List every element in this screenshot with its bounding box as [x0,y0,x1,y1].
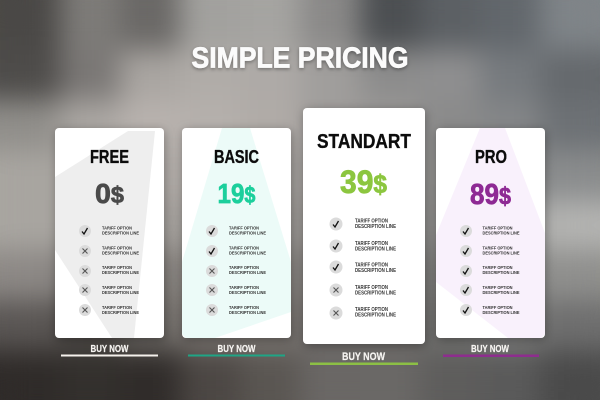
panel: basic plan: 19$ [218,178,256,209]
panel: free plan: FREE [90,147,129,167]
panel: basic plan: DESCRIPTION LINE [229,270,266,275]
button: free plan: BUY NOW [90,344,129,355]
panel: basic plan [182,128,291,338]
button: pro plan [443,344,539,357]
panel: free plan [55,128,164,338]
panel: standart plan: TARIFF OPTION [355,307,388,313]
panel: standart plan: DESCRIPTION LINE [355,268,397,274]
panel: pro plan: PRO [475,147,507,167]
panel: standart plan: DESCRIPTION LINE [355,246,397,252]
panel: standart plan: DESCRIPTION LINE [355,312,397,318]
panel: free plan: TARIFF OPTION [102,265,133,270]
panel: basic plan: TARIFF OPTION [229,305,260,310]
panel: free plan: TARIFF OPTION [102,246,133,250]
panel: free plan: TARIFF OPTION [102,226,133,230]
panel: pro plan: 89$ [470,179,512,211]
panel: pro plan: TARIFF OPTION [482,285,513,290]
panel: free plan: TARIFF OPTION [102,305,133,310]
panel: pro plan: TARIFF OPTION [482,246,513,250]
panel: basic plan: DESCRIPTION LINE [229,290,266,295]
panel: standart plan: TARIFF OPTION [355,241,388,247]
panel: pro plan: DESCRIPTION LINE [482,310,520,315]
button: free plan [61,344,158,356]
title: SIMPLE PRICING [192,42,408,74]
panel: pro plan: TARIFF OPTION [482,226,513,230]
panel: free plan: DESCRIPTION LINE [102,250,139,256]
button: basic plan [188,344,285,356]
panel: free plan: DESCRIPTION LINE [102,230,139,236]
panel: free plan: TARIFF OPTION [102,285,133,290]
panel: basic plan: TARIFF OPTION [229,265,260,270]
panel: standart plan: DESCRIPTION LINE [355,290,397,296]
panel: standart plan: DESCRIPTION LINE [355,224,397,230]
panel: pro plan: TARIFF OPTION [482,265,513,270]
panel: pro plan: DESCRIPTION LINE [482,250,520,256]
button: standart plan: BUY NOW [342,351,385,363]
panel: basic plan: TARIFF OPTION [229,285,260,290]
panel: standart plan: TARIFF OPTION [355,285,388,291]
panel: pro plan: DESCRIPTION LINE [482,230,520,236]
panel: standart plan: STANDART [317,131,411,153]
panel: standart plan [303,108,425,344]
panel: basic plan: DESCRIPTION LINE [229,250,266,256]
button: basic plan: BUY NOW [218,344,256,355]
panel: free plan: DESCRIPTION LINE [102,290,139,295]
panel: pro plan: DESCRIPTION LINE [482,270,520,275]
panel: free plan: 0$ [95,178,124,209]
panel: basic plan: BASIC [214,147,259,167]
panel: standart plan: TARIFF OPTION [355,262,388,268]
panel: pro plan: TARIFF OPTION [482,305,513,310]
panel: standart plan: TARIFF OPTION [355,218,388,224]
panel: basic plan: DESCRIPTION LINE [229,230,266,236]
button: pro plan: BUY NOW [471,344,509,355]
panel: free plan: DESCRIPTION LINE [102,270,139,275]
panel: pro plan [436,128,545,338]
panel: basic plan: TARIFF OPTION [229,226,260,230]
panel: free plan: DESCRIPTION LINE [102,310,139,315]
panel: pro plan: DESCRIPTION LINE [482,290,520,295]
panel: standart plan: 39$ [340,164,387,200]
panel: basic plan: TARIFF OPTION [229,246,260,250]
button: standart plan [310,351,418,365]
panel: basic plan: DESCRIPTION LINE [229,310,266,315]
